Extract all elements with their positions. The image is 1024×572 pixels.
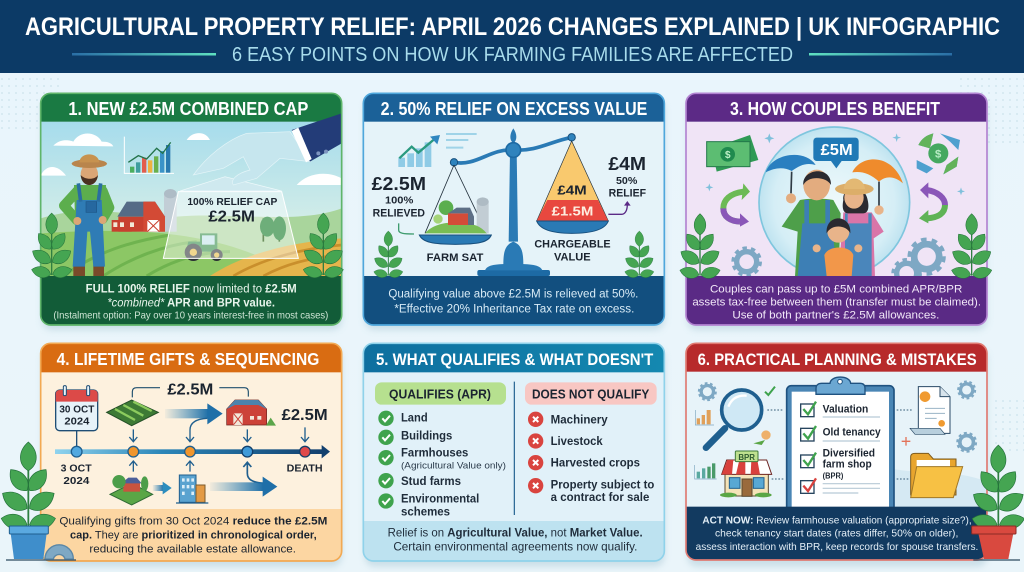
scale labels: 50%	[616, 176, 638, 187]
scale labels: 100%	[385, 195, 413, 206]
heading: 3. HOW COUPLES BENEFIT	[730, 98, 940, 119]
heading: 1. NEW £2.5M COMBINED CAP	[68, 98, 308, 119]
icon: barn	[227, 400, 276, 426]
icon: calendar	[56, 386, 98, 447]
description: cap. They are prioritized in chronological order,	[70, 529, 317, 541]
panel 3: how couples benefit	[678, 93, 994, 330]
description: Certain environmental agreements now qualify.	[393, 541, 637, 554]
column: qualifies: Buildings	[401, 428, 453, 442]
icon: magnifying glass	[706, 390, 762, 448]
scale labels: FARM SAT	[427, 252, 483, 264]
column: does not qualify	[525, 382, 657, 504]
icon: clipboard	[787, 377, 894, 519]
description: Qualifying gifts from 30 Oct 2024 reduce the £2.5M	[59, 515, 327, 527]
checklist	[823, 403, 881, 480]
decorative sparkles	[705, 133, 965, 195]
cap label: £2.5M	[208, 208, 255, 225]
column: does not qualify: a contract for sale	[551, 490, 650, 504]
panel 1: new combined cap	[29, 93, 346, 330]
glass cap shield	[163, 192, 298, 258]
arrow: building to estate	[210, 477, 277, 497]
icon: calendar: 2024	[64, 416, 90, 427]
icon: house on land	[110, 475, 153, 505]
cap label: £2.5M	[167, 381, 213, 398]
icon: farmer	[64, 154, 109, 276]
description: Couples can pass up to £5M combined APR/BPR	[710, 284, 962, 296]
checklist: Valuation	[823, 403, 869, 415]
description: assets tax-free between them (transfer must be claimed).	[692, 297, 981, 309]
heading: 2. 50% RELIEF ON EXCESS VALUE	[381, 98, 647, 119]
icon: plants	[678, 214, 994, 280]
description	[696, 515, 978, 553]
scale labels: £4M	[557, 182, 587, 197]
timeline arrows	[129, 418, 309, 483]
description: FULL 100% RELIEF now limited to £2.5M	[86, 282, 297, 296]
panel 5: what qualifies and what does not	[363, 343, 665, 567]
icon: folder	[911, 453, 963, 498]
column: qualifies: QUALIFIES (APR)	[389, 387, 491, 401]
cap label: 100% RELIEF CAP	[187, 197, 278, 208]
column: qualifies: Environmental	[401, 491, 479, 505]
scale labels: RELIEVED	[373, 207, 425, 219]
timeline date labels	[61, 464, 323, 487]
cap label	[187, 197, 278, 225]
icon: circular arrows	[723, 133, 960, 227]
icon: calendar: 30 OCT	[59, 404, 94, 415]
column: does not qualify: DOES NOT QUALIFY	[532, 387, 650, 401]
panel 4: lifetime gifts and sequencing	[0, 343, 342, 567]
description	[388, 287, 638, 315]
scale labels: VALUE	[554, 252, 591, 264]
column: does not qualify: Harvested crops	[551, 456, 640, 470]
column: qualifies: Land	[401, 411, 428, 425]
scale labels: RELIEF	[609, 188, 646, 200]
scale labels: £4M	[608, 153, 646, 174]
icon: gears	[733, 240, 943, 287]
timeline date labels: 3 OCT	[61, 464, 92, 475]
description: Qualifying value above £2.5M is relieved at 50%.	[388, 287, 638, 301]
description: assess interaction with BPR, keep records for spouse transfers.	[696, 542, 978, 553]
column: does not qualify: Machinery	[551, 412, 608, 426]
subtitle: 6 EASY POINTS ON HOW UK FARMING FAMILIES ARE AFFECTED	[232, 44, 793, 66]
description	[53, 282, 328, 321]
checklist: Diversified	[823, 448, 875, 460]
badge	[813, 138, 859, 168]
icon: hand placing cap	[180, 113, 342, 191]
arrow: land to barn	[165, 403, 223, 424]
icon: growth chart	[124, 137, 174, 173]
icon: tractor	[185, 233, 223, 261]
icon: circular arrows: $	[935, 149, 942, 161]
description: (Instalment option: Pay over 10 years interest-free in most cases)	[53, 310, 328, 321]
column: qualifies: Stud farms	[401, 474, 461, 488]
column: qualifies	[375, 382, 506, 519]
scale labels: £1.5M	[552, 204, 593, 219]
header banner	[0, 0, 1024, 73]
icon: balance scale	[419, 128, 608, 276]
arrow: house to building	[153, 482, 172, 494]
description: *combined* APR and BPR value.	[107, 295, 275, 309]
bracket	[132, 388, 248, 397]
icon: banknotes	[707, 135, 758, 172]
column: does not qualify: Livestock	[551, 434, 603, 448]
icon: plants	[29, 213, 346, 280]
icon: gears and small charts	[695, 382, 976, 479]
icon: plants	[372, 231, 655, 279]
dotted connectors	[767, 410, 912, 479]
badge amount: £5M	[821, 142, 853, 159]
column: does not qualify: Property subject to	[551, 477, 654, 491]
description: Use of both partner's £2.5M allowances.	[732, 310, 939, 322]
column: qualifies: (Agricultural Value only)	[401, 460, 506, 470]
scale labels: £2.5M	[372, 173, 426, 194]
column: qualifies: schemes	[401, 505, 450, 519]
scale labels: CHARGEABLE	[534, 239, 611, 251]
description	[692, 284, 981, 322]
timeline date labels: DEATH	[287, 464, 323, 475]
panel 2: relief on excess value	[363, 93, 665, 330]
description: Relief is on Agricultural Value, not Market Value.	[388, 527, 643, 540]
heading: 6. PRACTICAL PLANNING & MISTAKES	[698, 350, 977, 369]
description: reducing the available estate allowance.	[89, 543, 296, 555]
description: check tenancy start dates (rates differ, 50% on older),	[715, 528, 958, 539]
death label amount: £2.5M	[282, 407, 328, 424]
icon: potted plant	[969, 445, 1024, 560]
checklist: farm shop	[823, 459, 872, 471]
description: ACT NOW: Review farmhouse valuation (appropriate size?),	[702, 515, 972, 526]
checklist: Old tenancy	[823, 427, 881, 439]
icon: potted plant	[0, 442, 76, 560]
icon: farm shop	[720, 451, 772, 497]
bubble with family	[759, 127, 910, 278]
icon: land parcel	[107, 400, 158, 426]
description	[59, 515, 327, 555]
icon: document	[910, 387, 950, 434]
heading: 4. LIFETIME GIFTS & SEQUENCING	[57, 349, 319, 369]
timeline	[55, 445, 330, 458]
icon: office building	[176, 475, 208, 503]
icon: barn and silo	[112, 189, 177, 232]
column: qualifies: Farmhouses	[401, 446, 469, 460]
timeline date labels: 2024	[63, 476, 90, 487]
description: *Effective 20% Inheritance Tax rate on excess.	[394, 301, 634, 315]
heading: 5. WHAT QUALIFIES & WHAT DOESN'T	[376, 350, 653, 369]
icon: banknotes: $	[725, 150, 731, 161]
description	[388, 527, 643, 554]
checklist: (BPR)	[823, 471, 844, 480]
icon: farm shop: BPR	[738, 453, 755, 462]
panel 6: practical planning and mistakes	[686, 343, 1024, 567]
icon: small arrows	[399, 201, 631, 234]
icon: chart and arrow	[398, 134, 477, 167]
scale labels	[372, 153, 646, 264]
